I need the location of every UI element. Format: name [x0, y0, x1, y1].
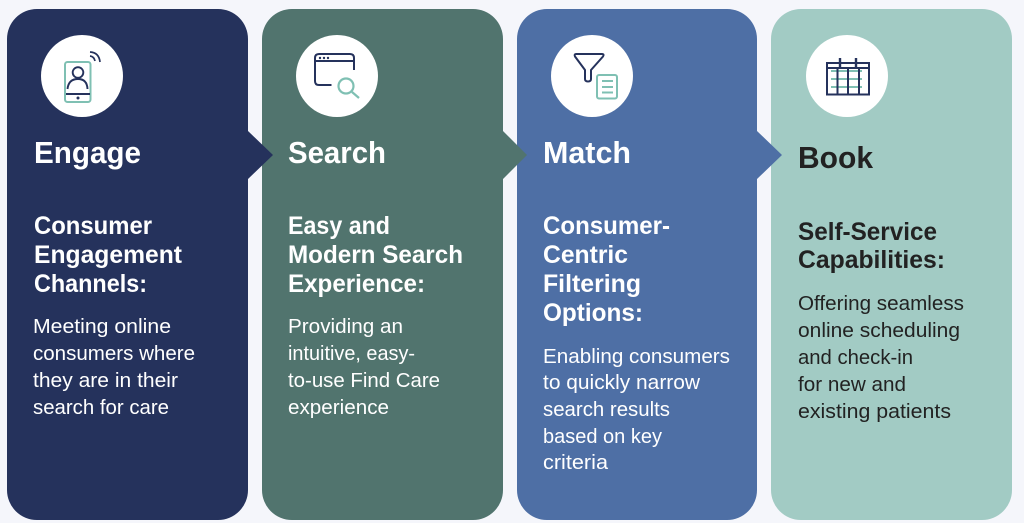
- text: Match description: criteria: [543, 451, 609, 474]
- text: Engage description: consumers where: [33, 342, 195, 365]
- subheading: Consumer-Centric Filtering Options: Options:: [543, 299, 643, 327]
- text: Search description: [288, 315, 440, 419]
- text: Book description: existing patients: [798, 400, 951, 423]
- heading: Match: Match: [543, 135, 631, 170]
- text: Book description: and check-in: [798, 346, 913, 369]
- subheading: Consumer Engagement Channels: Channels:: [34, 270, 147, 298]
- icon: browser window with magnifier: [296, 35, 378, 117]
- text: Book description: online scheduling: [798, 319, 960, 342]
- icon: calendar: [806, 35, 888, 117]
- heading: Book: Book: [798, 140, 874, 175]
- text: Search description: Providing an: [288, 315, 403, 338]
- subheading: Consumer Engagement Channels: [34, 212, 183, 298]
- text: Engage description: search for care: [33, 396, 169, 419]
- text: Book description: for new and: [798, 373, 906, 396]
- text: Book description: Offering seamless: [798, 292, 964, 315]
- panel: Match: [517, 9, 782, 520]
- subheading: Easy and Modern Search Experience: Modern Search: [288, 241, 463, 269]
- icon: phone with person: [41, 35, 123, 117]
- subheading: Consumer-Centric Filtering Options: Centric: [543, 241, 628, 269]
- panel: Book: [771, 9, 1012, 520]
- subheading: Consumer Engagement Channels: Consumer: [34, 212, 152, 240]
- text: Book description: [798, 292, 964, 423]
- subheading: Easy and Modern Search Experience: [288, 212, 463, 298]
- text: Engage description: Meeting online: [33, 315, 171, 338]
- text: Match description: search results: [543, 398, 670, 421]
- subheading: Self-Service Capabilities: Capabilities:: [798, 246, 945, 274]
- text: Match description: to quickly narrow: [543, 371, 700, 394]
- subheading: Consumer-Centric Filtering Options: Filtering: [543, 270, 641, 298]
- heading: Engage: Engage: [34, 135, 141, 170]
- subheading: Self-Service Capabilities: Self-Service: [798, 218, 937, 246]
- panel: Engage: [7, 9, 273, 520]
- subheading: Consumer Engagement Channels: Engagement: [34, 241, 183, 269]
- subheading: Consumer-Centric Filtering Options: [543, 212, 670, 327]
- subheading: Self-Service Capabilities: [798, 218, 945, 274]
- text: Search description: to-use Find Care: [288, 369, 440, 392]
- subheading: Easy and Modern Search Experience: Experience:: [288, 270, 425, 298]
- text: Engage description: they are in their: [33, 369, 178, 392]
- text: Search description: experience: [288, 396, 389, 419]
- text: Match description: based on key: [543, 425, 663, 448]
- text: Match description: [543, 345, 730, 474]
- panel: Search: [262, 9, 527, 520]
- heading: Search: Search: [288, 135, 386, 170]
- icon: funnel and document: [551, 35, 633, 117]
- subheading: Consumer-Centric Filtering Options: Consumer-: [543, 212, 670, 240]
- text: Match description: Enabling consumers: [543, 345, 730, 368]
- subheading: Easy and Modern Search Experience: Easy and: [288, 212, 390, 240]
- text: Search description: intuitive, easy-: [288, 342, 415, 365]
- text: Engage description: [33, 315, 195, 419]
